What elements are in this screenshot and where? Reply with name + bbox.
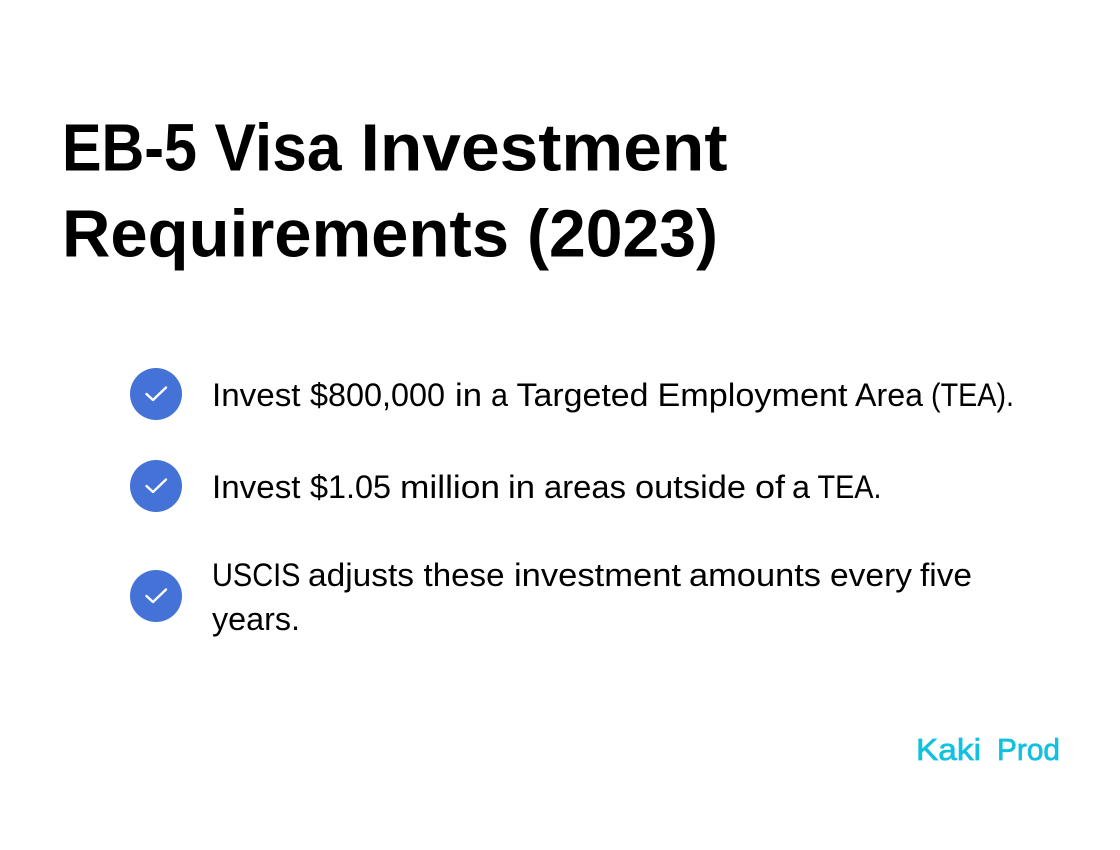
text: item 3: years. xyxy=(212,601,300,637)
text: item 1: a xyxy=(491,377,508,413)
text: item 1: in xyxy=(455,377,482,413)
text: item 3: five xyxy=(920,557,972,593)
logo: Kaki Prod xyxy=(916,732,1060,767)
text: item 3: investment xyxy=(514,557,681,593)
text: item 3: every xyxy=(830,557,912,593)
title: Visa xyxy=(214,110,342,186)
checklist item: TEA investment xyxy=(130,368,1014,420)
text: item 1: Employment xyxy=(658,377,848,413)
text: item 3: amounts xyxy=(689,557,821,593)
title: (2023) xyxy=(527,196,718,272)
text: item 3: adjusts xyxy=(308,557,414,593)
title xyxy=(62,110,728,272)
text: item 2: outside xyxy=(635,469,746,505)
text: item 1: Targeted xyxy=(516,377,648,413)
icon: check mark 2 xyxy=(130,460,182,512)
text: item 2: in xyxy=(508,469,535,505)
text: item 3 xyxy=(212,557,972,637)
title: EB-5 xyxy=(62,110,197,186)
checklist item: non-TEA investment xyxy=(130,460,882,512)
icon: check mark 3 xyxy=(130,570,182,622)
text: item 3: these xyxy=(424,557,504,593)
text: item 2: areas xyxy=(544,469,626,505)
text: item 1: $800,000 xyxy=(310,377,445,413)
text: item 2: $1.05 xyxy=(310,469,391,505)
text: item 2 xyxy=(212,469,882,505)
icon: check mark 1 xyxy=(130,368,182,420)
text: item 2: Invest xyxy=(212,469,301,505)
title: Requirements xyxy=(62,196,509,272)
text: item 2: a xyxy=(792,469,810,505)
checklist item: USCIS adjustment xyxy=(130,557,972,637)
text: item 2: million xyxy=(400,469,500,505)
text: item 1: Area xyxy=(855,377,923,413)
title: Investment xyxy=(360,110,728,186)
text: item 2: of xyxy=(755,469,785,505)
text: item 2: TEA. xyxy=(818,469,882,505)
logo: Kaki Prod: Kaki xyxy=(916,732,981,767)
logo: Kaki Prod: Prod xyxy=(997,732,1060,767)
text: item 1: Invest xyxy=(212,377,301,413)
text: item 1: (TEA). xyxy=(931,377,1014,413)
text: item 1 xyxy=(212,377,1014,413)
text: item 3: USCIS xyxy=(212,557,300,593)
